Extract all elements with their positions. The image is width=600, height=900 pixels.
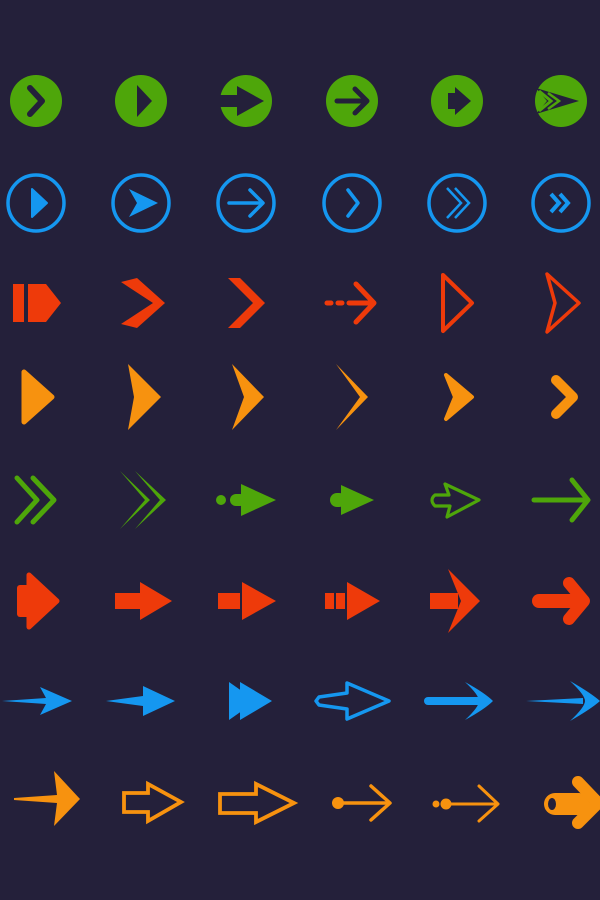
icon: red dashed arrow: [327, 284, 374, 322]
row 4: orange chevrons: [24, 364, 573, 430]
icon: blue thin dart arrow: [2, 687, 72, 715]
icon: blue ring dart: [113, 175, 169, 231]
icon: red square arrow: [218, 582, 276, 620]
row 1: green filled circles: [10, 75, 587, 127]
row 2: blue outlined circles: [8, 175, 589, 231]
icon: blue thin swoosh arrow: [526, 681, 600, 721]
row 7: blue arrows: [2, 681, 600, 721]
icon: green circle arrow with tail: [219, 75, 272, 127]
icon: red double bar arrow: [325, 582, 380, 620]
icon: green circle block arrow: [431, 75, 483, 127]
icon: green line arrow: [534, 480, 588, 520]
icon: green double thin dart: [120, 471, 166, 529]
icon: red thick chevron: [228, 278, 265, 328]
icon: blue double triangle: [229, 682, 272, 720]
icon: green short arrow: [330, 485, 374, 515]
icon: orange two dot line arrow: [432, 786, 498, 821]
row 6: red block arrows: [17, 569, 584, 633]
row 8: orange arrows: [14, 771, 598, 826]
icon: green outline cursor arrow: [432, 484, 479, 517]
icon: red flared chevron: [121, 278, 165, 328]
icon: orange long outline block arrow: [220, 784, 294, 822]
icon: orange outline block arrow: [124, 784, 181, 821]
icon: green dot arrow: [216, 484, 276, 516]
row 3: red arrows: [13, 274, 579, 332]
icon: orange bold chevron: [556, 380, 573, 414]
icon: blue tapered arrow: [106, 686, 175, 716]
icon: orange thin dart: [336, 364, 368, 430]
icon: orange tapered dart: [14, 771, 80, 826]
icon: green circle send: [535, 75, 587, 127]
icon: red bar dart: [430, 569, 480, 633]
icon: red block arrow: [115, 582, 172, 620]
icon: blue ring double thin chevron: [429, 175, 485, 231]
icon: blue outline arrow: [316, 683, 389, 719]
icon: green double chevron: [17, 478, 54, 522]
icon: orange dot line arrow: [332, 786, 390, 820]
icon: orange wide dart: [128, 364, 161, 430]
icon: orange pipe arrow: [544, 782, 598, 823]
icon: blue ring double bold chevron: [533, 175, 589, 231]
icon: orange medium dart: [232, 364, 264, 430]
icon: green circle chevron: [10, 75, 62, 127]
icon: blue ring play: [8, 175, 64, 231]
icon: red rounded block arrow: [17, 575, 57, 627]
icon: red outline triangle: [443, 275, 472, 331]
icon: red rounded arrow: [539, 583, 584, 619]
icon: orange rounded chevron: [446, 375, 472, 419]
icon: blue ring chevron: [324, 175, 380, 231]
icon: red outline dart: [547, 274, 579, 332]
icon: green circle line arrow: [326, 75, 378, 127]
icon: blue ring arrow: [218, 175, 274, 231]
icon: blue swoosh arrow: [428, 682, 493, 720]
icon: green circle play: [115, 75, 167, 127]
row 5: green arrows: [17, 471, 588, 529]
icon: orange rounded triangle: [24, 372, 52, 422]
icon: red bar pentagon: [13, 284, 61, 322]
